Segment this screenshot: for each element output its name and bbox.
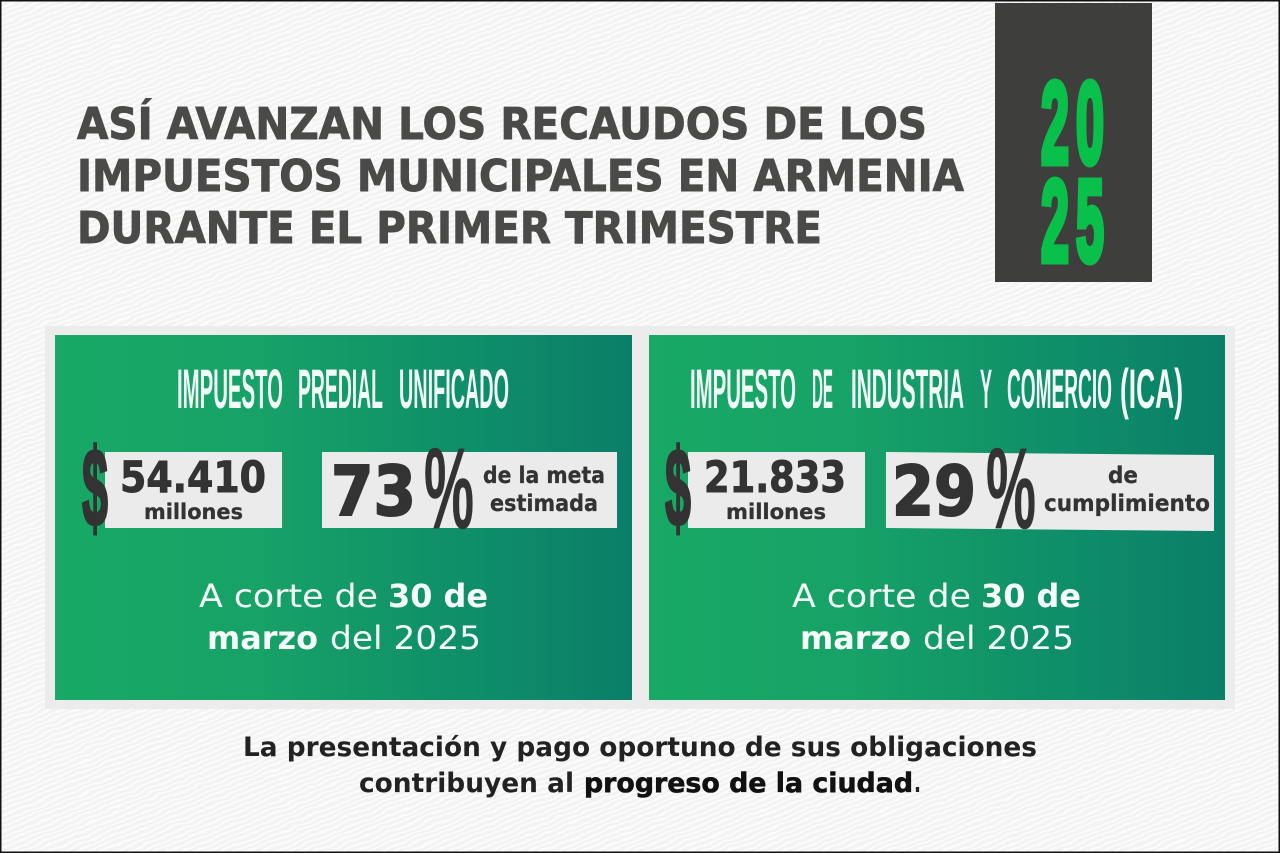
amount box: [82, 427, 282, 550]
panel: impuesto de industria y comercio: (ICA): [1120, 357, 1183, 420]
amount box: millones: [726, 500, 826, 524]
date note: 30 de: [388, 577, 488, 615]
footer message: .: [914, 768, 921, 799]
title: [77, 97, 964, 254]
panel heading: Y: [980, 357, 992, 420]
panel heading: IMPUESTO: [690, 357, 796, 420]
panel heading: PREDIAL: [298, 357, 383, 420]
panel heading: IMPUESTO: [177, 357, 283, 420]
panel heading: [690, 357, 1183, 420]
panels backing: [45, 326, 1235, 709]
amount box: 54.410: [120, 453, 266, 503]
percentage box: de la meta: [483, 463, 605, 489]
percentage box: [322, 425, 617, 553]
date note: A corte de: [792, 577, 971, 615]
year badge: 0: [1076, 58, 1104, 188]
year badge: 5: [1076, 156, 1104, 286]
percentage box: 29: [892, 452, 976, 532]
date note: marzo: [207, 619, 318, 657]
percentage box: 73: [331, 452, 416, 532]
panel heading: INDUSTRIA: [851, 357, 964, 420]
amount box: [665, 427, 865, 550]
date note: del 2025: [923, 619, 1074, 657]
date note: [199, 577, 488, 657]
footer message: progreso de la ciudad: [584, 768, 913, 799]
panel heading: DE: [812, 357, 833, 420]
percentage box: %: [986, 425, 1036, 553]
panel: impuesto de industria y comercio: [649, 335, 1225, 700]
date note: marzo: [800, 619, 911, 657]
amount box: millones: [144, 500, 243, 524]
footer message: La presentación y pago oportuno de sus obligaciones: [243, 732, 1037, 763]
percentage box: [886, 425, 1214, 553]
percentage box: cumplimiento: [1044, 491, 1210, 517]
amount box: $: [665, 427, 691, 550]
footer message: contribuyen al: [359, 768, 574, 799]
year badge: 2: [1041, 156, 1069, 286]
date note: 30 de: [981, 577, 1081, 615]
amount box: 21.833: [704, 453, 846, 503]
panel: impuesto predial: UNIFICADO: [399, 357, 509, 420]
year badge: 2: [1041, 58, 1069, 188]
percentage box: %: [424, 425, 474, 553]
title: ASÍ AVANZAN LOS RECAUDOS DE LOS: [77, 97, 927, 150]
title: DURANTE EL PRIMER TRIMESTRE: [77, 203, 822, 254]
date note: del 2025: [330, 619, 481, 657]
year badge: [995, 3, 1152, 286]
panel: impuesto predial: [55, 335, 632, 700]
footer message: [243, 732, 1037, 799]
date note: [792, 577, 1081, 657]
date note: A corte de: [199, 577, 378, 615]
title: IMPUESTOS MUNICIPALES EN ARMENIA: [77, 151, 964, 202]
percentage box: estimada: [490, 491, 598, 517]
amount box: $: [82, 427, 108, 550]
percentage box: de: [1108, 463, 1138, 489]
